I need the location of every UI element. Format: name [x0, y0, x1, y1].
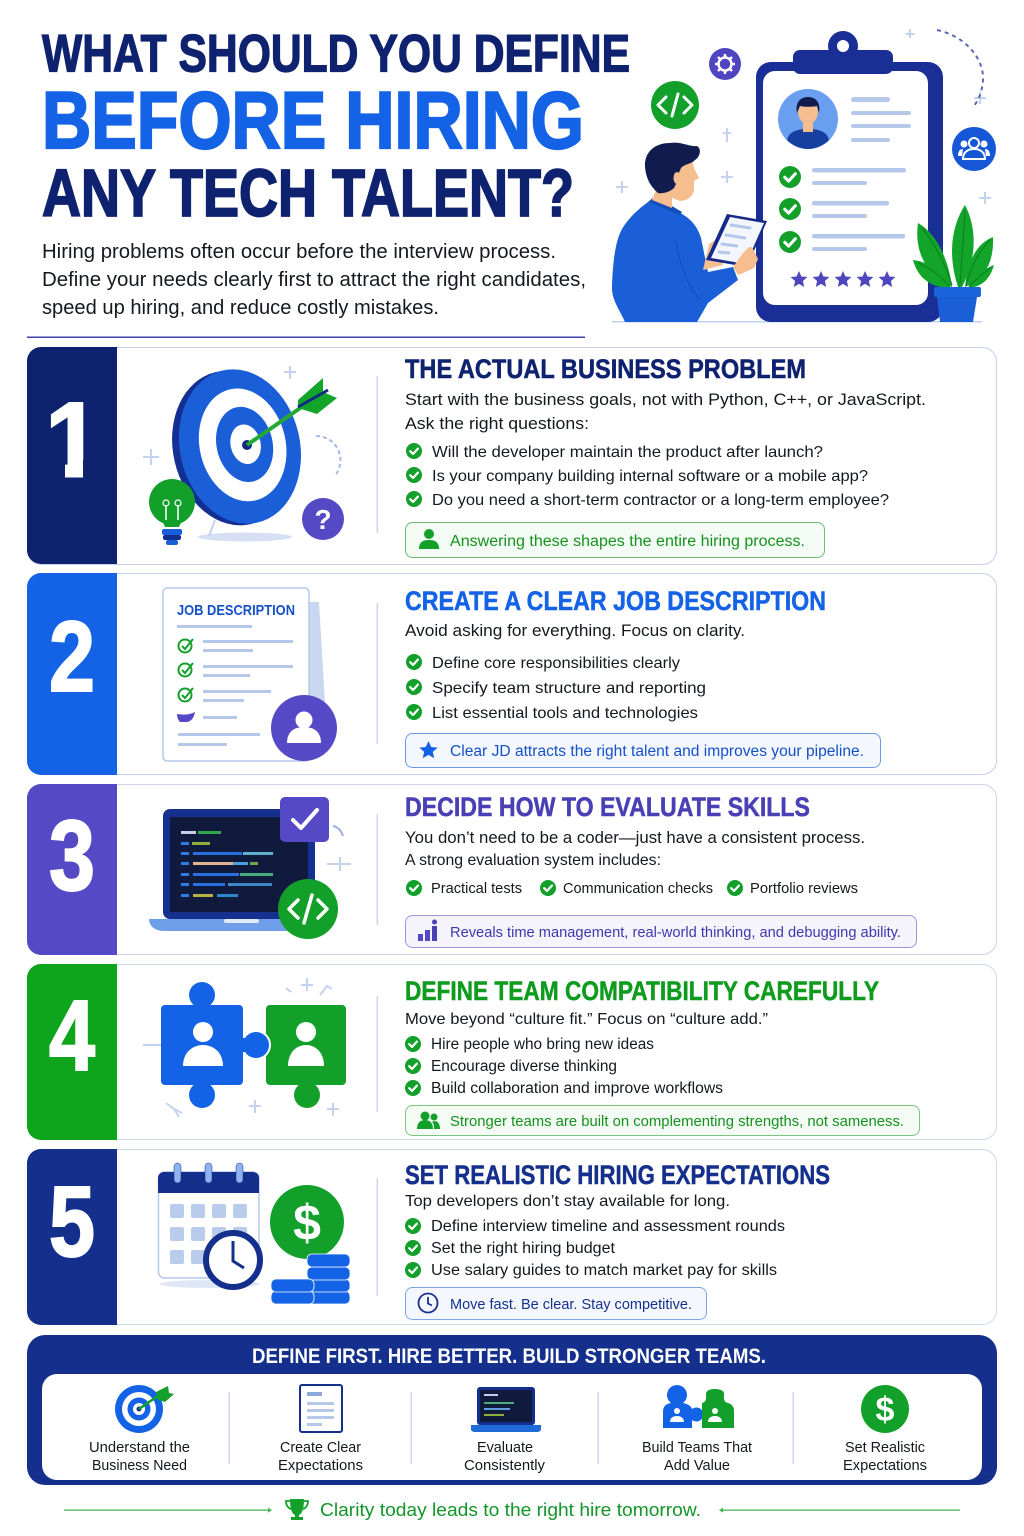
summary item: clear expectations — [278, 1385, 363, 1474]
icon: team — [952, 127, 996, 171]
step 1 callout: Answering these shapes the entire hiring process. — [450, 533, 805, 550]
icon: gear — [709, 48, 741, 80]
summary item: evaluate consistently: Evaluate — [477, 1440, 533, 1456]
step 1 text: Is your company building internal software or a mobile app? — [432, 468, 868, 485]
icon: target with arrow — [143, 357, 344, 545]
step 5 text: Top developers don’t stay available for long. — [405, 1193, 730, 1210]
summary item: build teams: Build Teams That — [642, 1440, 752, 1456]
step 2 text: Define core responsibilities clearly — [432, 655, 680, 672]
step 2 number block — [27, 573, 117, 775]
step 1 text: Start with the business goals, not with Python, C++, or JavaScript. — [405, 390, 926, 409]
step 3 text: Communication checks — [563, 881, 713, 897]
panel: step 2 — [27, 573, 996, 775]
step 5 callout: Move fast. Be clear. Stay competitive. — [450, 1296, 692, 1313]
step 5 number block — [27, 1149, 117, 1325]
intro text: speed up hiring, and reduce costly mistakes. — [42, 297, 439, 319]
step 3 text — [405, 792, 865, 897]
step 1 text: THE ACTUAL BUSINESS PROBLEM — [405, 354, 806, 384]
intro text — [42, 241, 586, 319]
step 1 text — [405, 354, 926, 509]
avatar — [778, 89, 838, 149]
step 5 text: SET REALISTIC HIRING EXPECTATIONS — [405, 1160, 830, 1190]
step 2 text: Specify team structure and reporting — [432, 680, 706, 697]
step 4 number block: 4 — [49, 980, 95, 1092]
step 3 number block — [27, 784, 117, 955]
icon: calendar, clock and coins — [158, 1163, 350, 1304]
step 2 callout: Clear JD attracts the right talent and improves your pipeline. — [450, 743, 864, 760]
title — [42, 24, 630, 231]
summary item: evaluate consistently — [464, 1387, 546, 1474]
icon: code — [651, 81, 699, 129]
closing tagline — [64, 1499, 960, 1520]
banner heading: DEFINE FIRST. HIRE BETTER. BUILD STRONGER TEAMS. — [252, 1345, 766, 1368]
panel: step 1 — [27, 347, 996, 564]
step 1 number block — [27, 347, 117, 564]
intro text: Hiring problems often occur before the interview process. — [42, 241, 556, 263]
step 2 text: List essential tools and technologies — [432, 705, 698, 722]
rating stars — [791, 271, 895, 287]
panel: step 5 — [27, 1149, 996, 1325]
step 4 text: Move beyond “culture fit.” Focus on “culture add.” — [405, 1011, 768, 1028]
icon: job description document — [163, 588, 337, 761]
icon: calendar, clock and coins: $ — [293, 1195, 321, 1251]
step 3 text: Portfolio reviews — [750, 881, 858, 897]
title: ANY TECH TALENT? — [42, 157, 574, 231]
panel: summary banner — [27, 1335, 997, 1485]
summary item: business need — [89, 1385, 190, 1474]
step 5 number block: 5 — [49, 1166, 95, 1278]
summary item: clear expectations: Expectations — [278, 1458, 363, 1474]
step 4 text: DEFINE TEAM COMPATIBILITY CAREFULLY — [405, 976, 879, 1006]
step 2 text: Avoid asking for everything. Focus on clarity. — [405, 621, 745, 640]
step 4 text: Build collaboration and improve workflows — [431, 1080, 723, 1097]
step 3 text: Practical tests — [431, 881, 522, 897]
icon: target with arrow: ? — [314, 504, 332, 535]
panel: step 4 — [27, 964, 996, 1140]
summary item: build teams — [642, 1385, 752, 1474]
plant — [913, 205, 994, 322]
panel: step 3 — [27, 784, 996, 955]
step 3 callout: Reveals time management, real-world thinking, and debugging ability. — [450, 924, 901, 941]
step 3 text: DECIDE HOW TO EVALUATE SKILLS — [405, 792, 810, 822]
step 2 text: CREATE A CLEAR JOB DESCRIPTION — [405, 586, 826, 616]
step 5 callout — [406, 1288, 706, 1320]
step 1 text: Ask the right questions: — [405, 414, 589, 433]
step 1 number block: 1 — [45, 380, 101, 500]
step 2 text — [405, 586, 826, 722]
clipboard — [756, 31, 943, 322]
step 4 text — [405, 976, 879, 1097]
title: WHAT SHOULD YOU DEFINE — [42, 24, 630, 84]
summary item: realistic expectations — [843, 1385, 927, 1474]
step 4 callout: Stronger teams are built on complementing strengths, not sameness. — [450, 1113, 904, 1130]
step 4 number block — [27, 964, 117, 1140]
step 5 text — [405, 1160, 830, 1279]
icon: trophy — [286, 1499, 308, 1520]
summary item: build teams: Add Value — [664, 1458, 730, 1474]
step 1 text: Will the developer maintain the product after launch? — [432, 444, 823, 461]
title: BEFORE HIRING — [42, 76, 584, 166]
summary item: realistic expectations: Expectations — [843, 1458, 927, 1474]
step 4 text: Encourage diverse thinking — [431, 1058, 617, 1075]
summary item: business need: Business Need — [92, 1458, 187, 1474]
icon: laptop with code — [149, 797, 351, 939]
step 3 number block: 3 — [49, 800, 95, 912]
step 5 text: Set the right hiring budget — [431, 1240, 616, 1257]
summary item: clear expectations: Create Clear — [280, 1440, 361, 1456]
person with tablet — [612, 143, 767, 322]
step 3 callout — [406, 916, 916, 948]
summary item: evaluate consistently: Consistently — [464, 1458, 546, 1474]
icon: puzzle pieces — [143, 978, 346, 1117]
step 1 text: Do you need a short-term contractor or a long-term employee? — [432, 492, 889, 509]
step 4 callout — [406, 1106, 920, 1136]
step 4 text: Hire people who bring new ideas — [431, 1036, 654, 1053]
step 2 number block: 2 — [49, 601, 95, 713]
step 3 text: A strong evaluation system includes: — [405, 852, 661, 869]
step 1 callout — [406, 522, 824, 558]
intro text: Define your needs clearly first to attract the right candidates, — [42, 269, 586, 291]
step 5 text: Define interview timeline and assessment rounds — [431, 1218, 785, 1235]
step 2 callout — [406, 734, 880, 768]
summary item: realistic expectations: Set Realistic — [845, 1440, 925, 1456]
step 5 text: Use salary guides to match market pay for skills — [431, 1262, 777, 1279]
closing tagline: Clarity today leads to the right hire tomorrow. — [320, 1499, 701, 1520]
step 3 text: You don’t need to be a coder—just have a consistent process. — [405, 828, 865, 847]
summary item: business need: Understand the — [89, 1440, 190, 1456]
icon: job description document: JOB DESCRIPTION — [177, 602, 295, 619]
summary item: realistic expectations: $ — [876, 1391, 895, 1429]
